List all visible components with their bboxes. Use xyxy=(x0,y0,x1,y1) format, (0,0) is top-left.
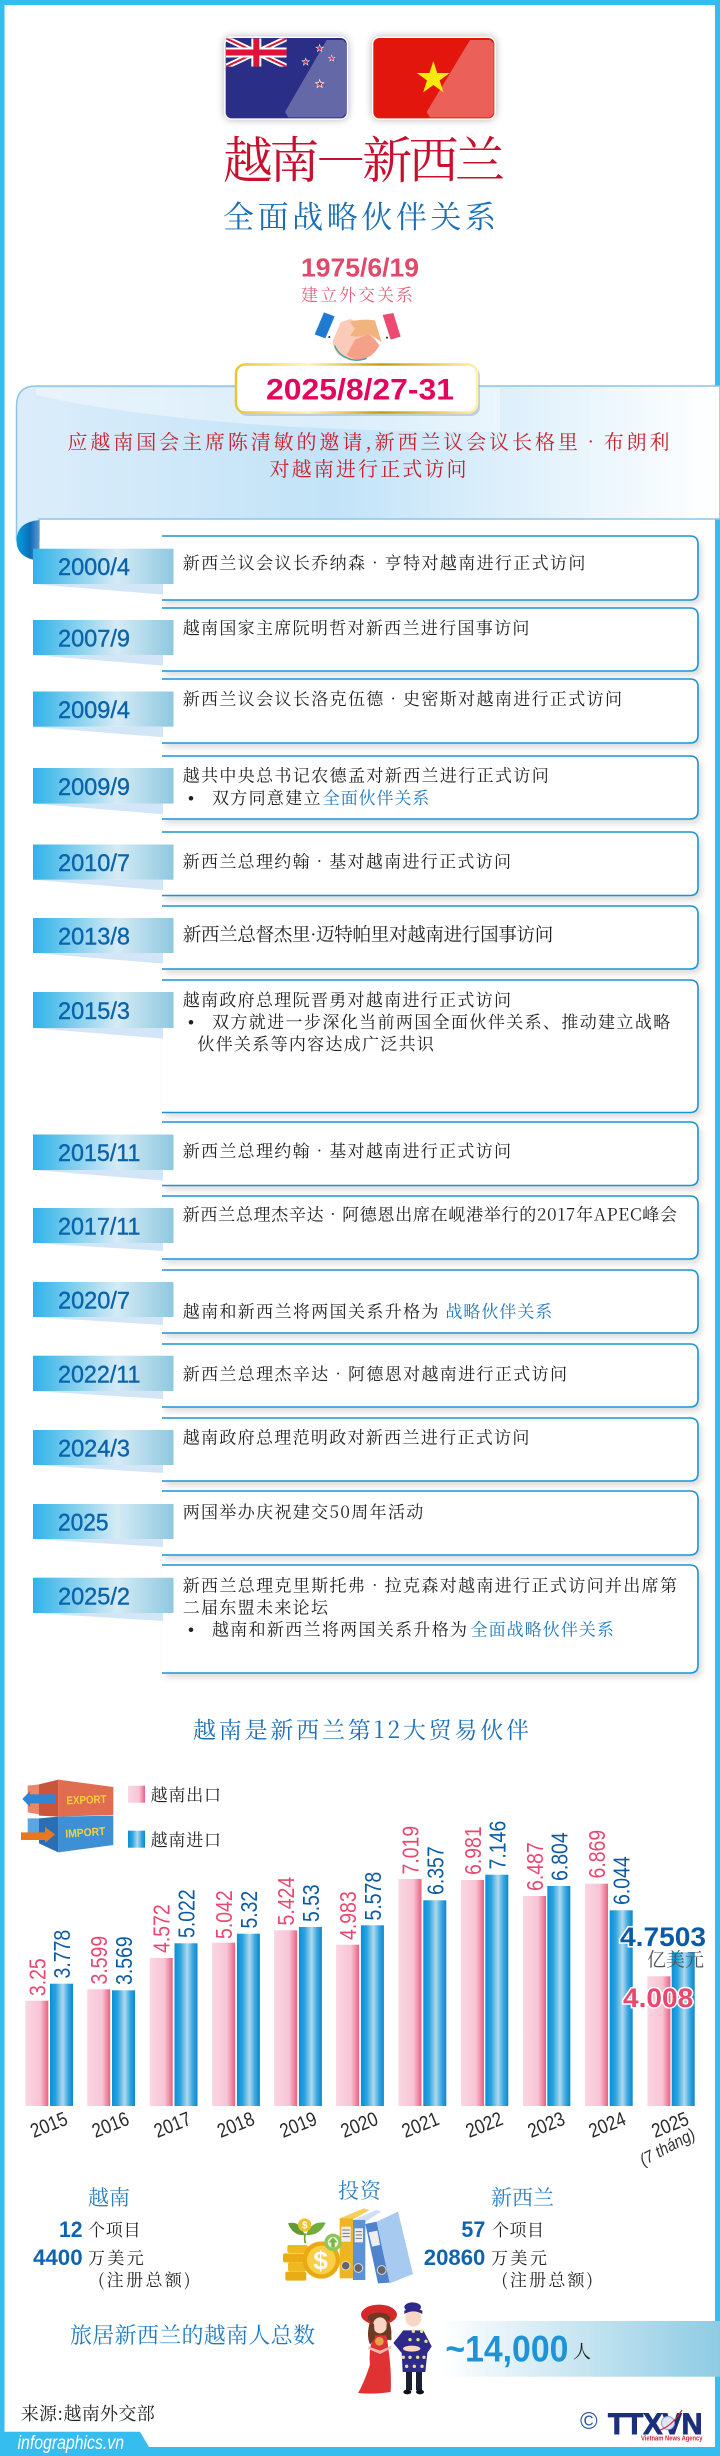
year axis labels: 2015 xyxy=(27,2108,71,2143)
year axis labels: 2022 xyxy=(463,2108,506,2143)
year axis labels: 2025 xyxy=(649,2108,692,2143)
investment: New Zealand: 新西兰 xyxy=(491,2182,554,2212)
population band: 人 xyxy=(573,2338,591,2364)
year axis labels xyxy=(27,2108,692,2143)
title: 越南—新西兰 xyxy=(223,121,505,193)
value labels: export: 5.424 xyxy=(273,1877,299,1926)
investment: Vietnam: 万美元 xyxy=(88,2244,144,2269)
website tab: infographics.vn xyxy=(18,2433,124,2454)
investment: New Zealand: 万美元 xyxy=(491,2244,547,2269)
card: 2025/2: • xyxy=(188,1621,194,1640)
card: 2015/11: 2015/11 xyxy=(58,1140,140,1167)
value labels: export: 6.981 xyxy=(460,1826,486,1875)
bars: import xyxy=(50,1875,695,2106)
investment: New Zealand: 57 xyxy=(461,2217,485,2242)
card: 2015/3: 伙伴关系等内容达成广泛共识 xyxy=(197,1030,435,1055)
unit label: 亿美元 xyxy=(647,1945,704,1972)
investment: New Zealand: (注册总额) xyxy=(501,2266,593,2291)
card: 2025/2: 全面战略伙伴关系 xyxy=(471,1616,614,1641)
card: 2009/4 xyxy=(33,679,698,743)
bar chart: trade 2015-2025 xyxy=(24,1821,706,2170)
card: 2015/11 xyxy=(33,1122,698,1186)
card: 2010/7: 新西兰总理约翰•基对越南进行正式访问 xyxy=(183,847,511,872)
year axis labels: 2018 xyxy=(214,2108,258,2143)
card: 2020/7 xyxy=(33,1270,698,1333)
flag: Vietnam xyxy=(373,37,495,119)
investment: Vietnam xyxy=(33,2182,190,2291)
value labels: import: 7.146 xyxy=(484,1821,510,1870)
card: 2009/4: 新西兰议会议长洛克伍德•史密斯对越南进行正式访问 xyxy=(183,685,622,710)
value labels: import: 3.569 xyxy=(111,1936,137,1985)
card: 2010/7 xyxy=(33,832,698,896)
icon: handshake xyxy=(315,312,401,361)
investment: New Zealand: 20860 xyxy=(424,2245,485,2270)
year axis labels: 2024 xyxy=(586,2108,629,2143)
icon: export import containers xyxy=(21,1780,113,1852)
value labels: import: 3.778 xyxy=(49,1930,75,1978)
population band xyxy=(441,2321,720,2377)
card: 2009/9: 2009/9 xyxy=(58,774,130,801)
card: 2024/3: 越南政府总理范明政对新西兰进行正式访问 xyxy=(183,1424,529,1449)
establishment date: 1975/6/19 xyxy=(301,252,419,282)
card: 2025/2: 2025/2 xyxy=(58,1584,130,1610)
card: 2015/3: 2015/3 xyxy=(58,998,130,1025)
logo: TTXVN: © xyxy=(580,2408,598,2435)
card: 2000/4: 新西兰议会议长乔纳森•亨特对越南进行正式访问 xyxy=(183,549,585,574)
card: 2000/4: 2000/4 xyxy=(58,554,130,581)
legend: Vietnam export: 越南出口 xyxy=(151,1781,221,1806)
card: 2007/9: 2007/9 xyxy=(58,626,130,652)
value labels: export: 6.869 xyxy=(584,1830,610,1878)
card: 2022/11: 2022/11 xyxy=(58,1362,140,1388)
icon: coins and binders: $ xyxy=(313,2245,328,2275)
ribbon curl xyxy=(16,520,40,561)
card: 2010/7: 2010/7 xyxy=(58,850,130,877)
icon: coins and binders xyxy=(283,2208,413,2283)
chart heading: 越南是新西兰第12大贸易伙伴 xyxy=(193,1712,529,1745)
value labels: import: 6.357 xyxy=(422,1846,448,1895)
year axis labels: 2017 xyxy=(151,2108,194,2143)
card: 2000/4 xyxy=(33,536,698,600)
card: 2015/3: 双方就进一步深化当前两国全面伙伴关系、推动建立战略 xyxy=(212,1008,670,1033)
investment: Vietnam: 越南 xyxy=(88,2182,130,2212)
investment heading: 投资 xyxy=(338,2175,382,2205)
announcement text line 1: 应越南国会主席陈清敏的邀请,新西兰议会议长格里•布朗利 xyxy=(68,426,670,455)
legend: Vietnam import: 越南进口 xyxy=(151,1826,221,1851)
card: 2009/9: 全面伙伴关系 xyxy=(323,784,429,809)
card: 2007/9 xyxy=(33,608,698,671)
card: 2009/9: 越共中央总书记农德孟对新西兰进行正式访问 xyxy=(183,762,549,787)
value labels: export: 3.599 xyxy=(86,1936,112,1984)
card: 2013/8 xyxy=(33,906,698,969)
overseas Vietnamese label: 旅居新西兰的越南人总数 xyxy=(70,2319,315,2350)
icon: coins and binders: $ xyxy=(302,2221,308,2232)
card: 2009/9: 双方同意建立 xyxy=(212,784,320,809)
card: 2025/2: 二届东盟未来论坛 xyxy=(183,1594,329,1618)
card: 2022/11 xyxy=(33,1344,698,1407)
value labels: export: 3.25 xyxy=(24,1958,50,1996)
subtitle: 全面战略伙伴关系 xyxy=(223,192,496,237)
card: 2009/9: • xyxy=(188,789,194,808)
card: 2015/3 xyxy=(33,980,698,1112)
year axis labels: 2023 xyxy=(525,2108,568,2143)
year axis labels: 2019 xyxy=(277,2108,320,2143)
icon: export import containers: IMPORT xyxy=(65,1826,106,1841)
card: 2015/11: 新西兰总理约翰•基对越南进行正式访问 xyxy=(183,1137,511,1162)
2025 export value: 4.008 xyxy=(623,1983,693,2013)
card: 2020/7: 越南和新西兰将两国关系升格为 xyxy=(183,1298,438,1323)
card: 2025: 两国举办庆祝建交50周年活动 xyxy=(183,1498,423,1523)
value labels: export xyxy=(24,1826,610,1996)
value labels: import: 5.578 xyxy=(360,1872,386,1920)
value labels: import xyxy=(49,1821,635,1985)
investment: New Zealand: 个项目 xyxy=(492,2216,544,2241)
flag: New Zealand xyxy=(225,37,347,119)
date badge: 2025/8/27-31 xyxy=(266,374,454,406)
card: 2013/8: 新西兰总督杰里·迈特帕里对越南进行国事访问 xyxy=(183,921,553,947)
population band: ~14,000 xyxy=(445,2329,568,2370)
card: 2015/3: • xyxy=(188,1013,194,1032)
card: 2017/11: 2017/11 xyxy=(58,1214,140,1240)
value labels: export: 7.019 xyxy=(398,1826,424,1874)
value labels: import: 5.53 xyxy=(298,1884,324,1922)
card: 2015/3: 越南政府总理阮晋勇对越南进行正式访问 xyxy=(183,986,511,1011)
year axis labels: 2020 xyxy=(338,2108,381,2143)
value labels: export: 4.572 xyxy=(149,1904,175,1953)
card: 2009/4: 2009/4 xyxy=(58,697,130,724)
investment: Vietnam: 个项目 xyxy=(88,2216,140,2241)
card: 2025/2: 新西兰总理克里斯托弗•拉克森对越南进行正式访问并出席第 xyxy=(183,1572,677,1597)
period note: (7 tháng) xyxy=(636,2125,698,2170)
announcement text line 2: 对越南进行正式访问 xyxy=(270,453,466,482)
value labels: import: 6.044 xyxy=(609,1856,635,1905)
card: 2017/11 xyxy=(33,1196,698,1259)
card: 2025/2: 越南和新西兰将两国关系升格为 xyxy=(212,1616,467,1641)
logo: TTXVN: Vietnam News Agency xyxy=(641,2436,703,2442)
icon: export import containers: EXPORT xyxy=(66,1794,107,1807)
value labels: import: 5.32 xyxy=(236,1891,262,1928)
card: 2013/8: 2013/8 xyxy=(58,924,130,950)
logo: TTXVN: TTXVN xyxy=(608,2408,702,2441)
card: 2020/7: 2020/7 xyxy=(58,1288,130,1314)
source: 来源:越南外交部 xyxy=(21,2400,155,2426)
investment: Vietnam: 12 xyxy=(59,2217,83,2242)
card: 2025: 2025 xyxy=(58,1510,108,1536)
card: 2022/11: 新西兰总理杰辛达•阿德恩对越南进行正式访问 xyxy=(183,1360,567,1385)
2025 import value: 4.7503 xyxy=(620,1922,706,1952)
value labels: import: 6.804 xyxy=(546,1832,572,1881)
card: 2017/11: 新西兰总理杰辛达•阿德恩出席在岘港举行的2017年APEC峰会 xyxy=(183,1200,677,1226)
value labels: export: 5.042 xyxy=(211,1890,237,1939)
card: 2009/9 xyxy=(33,756,698,819)
card: 2020/7: 战略伙伴关系 xyxy=(445,1298,552,1323)
panel: visit announcement xyxy=(16,386,720,540)
establishment caption: 建立外交关系 xyxy=(301,281,413,306)
card: 2025 xyxy=(33,1491,698,1555)
icon: couple in traditional dress xyxy=(358,2302,432,2394)
year axis labels: 2016 xyxy=(89,2108,132,2143)
year axis labels: 2021 xyxy=(399,2108,442,2143)
bars: export xyxy=(25,1879,670,2106)
date badge xyxy=(236,364,480,416)
investment: New Zealand xyxy=(424,2182,593,2291)
value labels: import: 5.022 xyxy=(174,1889,200,1938)
card: 2007/9: 越南国家主席阮明哲对新西兰进行国事访问 xyxy=(183,614,529,639)
investment: Vietnam: 4400 xyxy=(33,2245,83,2270)
card: 2024/3 xyxy=(33,1418,698,1481)
value labels: export: 4.983 xyxy=(335,1891,361,1940)
card: 2024/3: 2024/3 xyxy=(58,1436,130,1462)
value labels: export: 6.487 xyxy=(522,1842,548,1891)
card: 2025/2 xyxy=(33,1565,698,1673)
investment: Vietnam: (注册总额) xyxy=(98,2266,190,2291)
